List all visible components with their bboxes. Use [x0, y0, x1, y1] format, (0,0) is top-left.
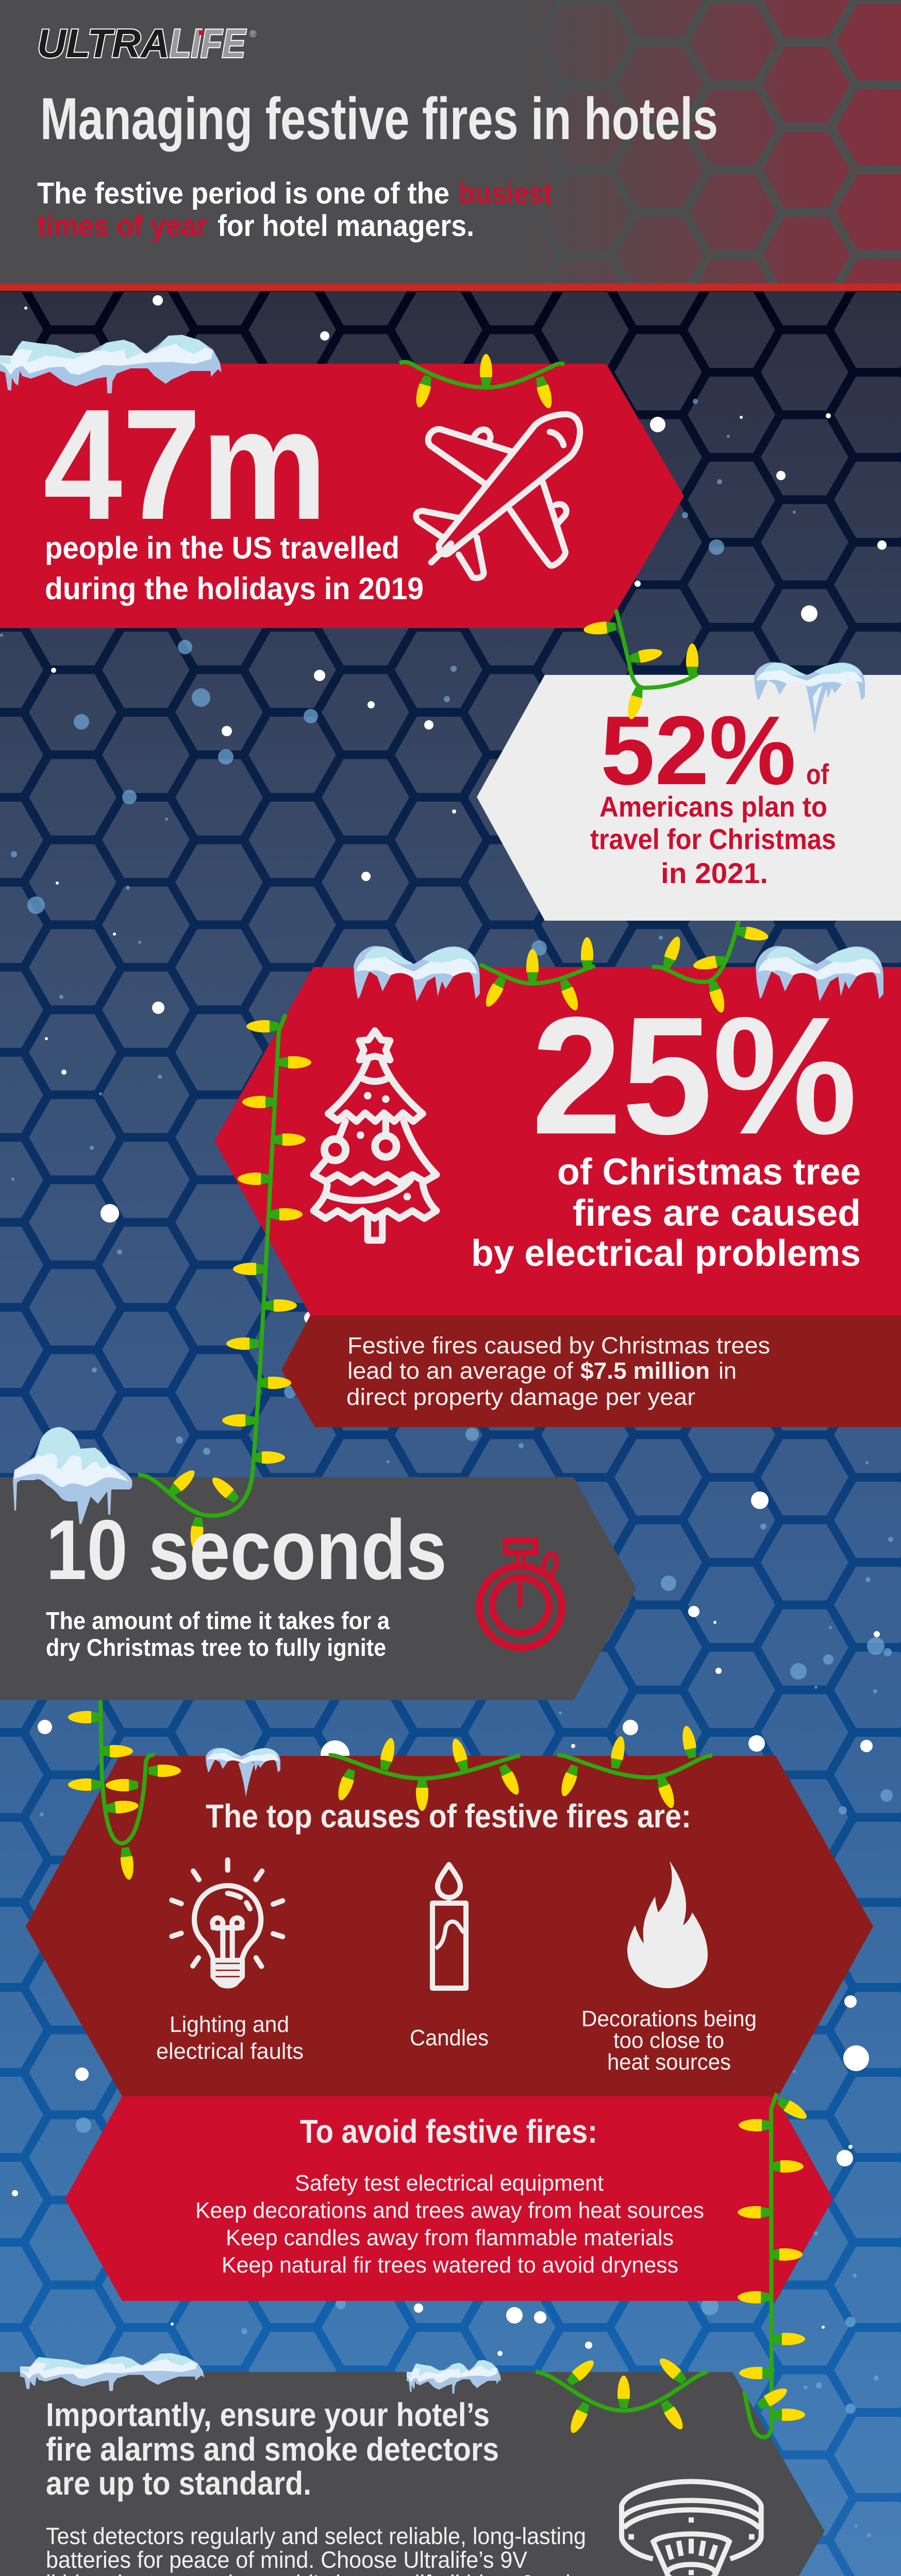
note text: Festive fires caused by Christmas trees — [347, 1332, 770, 1359]
light bulb behind heading — [189, 1517, 205, 1550]
stat caption: dry Christmas tree to fully ignite — [46, 1634, 386, 1661]
stat caption — [471, 1151, 861, 1274]
icon: light bulb — [172, 1860, 282, 1986]
body text: Test detectors regularly and select reliable, long-lasting — [46, 2523, 586, 2549]
stat caption — [45, 531, 424, 606]
snow cap on 52% panel — [754, 662, 865, 735]
label: lighting and electrical faults: electrical faults — [156, 2039, 304, 2064]
panel: property damage note — [281, 1315, 901, 1427]
stat: 10 seconds: 10 seconds — [46, 1502, 447, 1597]
advice list: Keep natural fir trees watered to avoid dryness — [222, 2252, 678, 2278]
label: lighting and electrical faults — [156, 2012, 304, 2064]
stat caption — [46, 1607, 390, 1661]
stat caption: fires are caused — [573, 1193, 861, 1234]
advice list: Keep candles away from flammable materials — [226, 2225, 674, 2250]
stat caption: people in the US travelled — [45, 531, 399, 565]
icon: Christmas tree — [313, 1031, 437, 1240]
stat caption: travel for Christmas — [590, 823, 836, 855]
snow cap left on alarms panel — [20, 2353, 204, 2391]
snow cap on top causes panel — [206, 1748, 280, 1797]
stat caption: Americans plan to — [599, 790, 827, 823]
stat caption: during the holidays in 2019 — [45, 571, 424, 606]
note text — [346, 1332, 770, 1410]
subtitle: busiest — [459, 177, 553, 210]
snow cap on 47m panel — [0, 335, 222, 393]
light bulb behind heading — [416, 1778, 428, 1811]
string of lights: left side of 25% panel to 10 seconds panel — [138, 1014, 311, 1516]
panel: fire alarms and smoke detectors — [0, 2372, 825, 2576]
note text: lead to an average of — [347, 1358, 574, 1384]
note text: direct property damage per year — [346, 1384, 695, 1410]
icon: aeroplane — [416, 414, 580, 578]
stat caption: of — [806, 758, 829, 790]
icon: stopwatch — [479, 1540, 562, 1648]
string of lights: top causes panel right — [557, 1725, 712, 1810]
string of lights: below 10 seconds panel — [68, 1700, 181, 1880]
label: decorations near heat sources — [581, 2006, 757, 2075]
panel: 52% of Americans — [477, 675, 901, 921]
icon: flame — [627, 1861, 708, 1988]
panel: top causes of festive fires — [26, 1756, 873, 2096]
heading: fire alarms and smoke detectors — [46, 2431, 499, 2468]
label: lighting and electrical faults: Lighting and — [170, 2012, 289, 2037]
string of lights: between 47m and 52% panels — [583, 609, 698, 721]
icon: candle — [432, 1865, 466, 1988]
heading: To avoid festive fires: — [300, 2113, 597, 2150]
stat: 52%: 52% — [600, 696, 796, 805]
note text: $7.5 million — [580, 1358, 710, 1384]
label: decorations near heat sources: Decorations being — [581, 2006, 757, 2031]
subtitle: The festive period is one of the — [37, 177, 449, 210]
string of lights: right side of avoid panel — [738, 2093, 810, 2437]
subtitle: times of year — [37, 209, 207, 243]
advice list: Safety test electrical equipment — [295, 2171, 604, 2196]
stat caption: by electrical problems — [471, 1233, 861, 1274]
body text: batteries for peace of mind. Choose Ultralife’s 9V — [46, 2547, 527, 2573]
stat caption — [590, 758, 836, 889]
label: candles: Candles — [410, 2025, 489, 2050]
stat caption: of Christmas tree — [557, 1151, 861, 1193]
panel: 47m people travelled — [0, 364, 684, 628]
string of lights: 25% panel top right — [652, 921, 770, 1014]
advice list: Keep decorations and trees away from heat sources — [195, 2198, 704, 2223]
body text — [46, 2523, 586, 2576]
logo: Ultralife: LIFE — [170, 21, 246, 66]
logo: Ultralife — [37, 21, 256, 66]
panel: 25% of Christmas tree fires — [214, 967, 901, 1315]
logo: Ultralife: ULTRA — [37, 21, 170, 66]
logo: Ultralife: ® — [249, 29, 256, 39]
heading — [46, 2396, 499, 2502]
string of lights: top of 47m panel — [399, 354, 564, 410]
stat: 47m: 47m — [43, 376, 327, 552]
stat: 25%: 25% — [531, 982, 857, 1169]
string of lights: 25% panel top left — [480, 937, 595, 1013]
heading: Importantly, ensure your hotel’s — [46, 2396, 490, 2433]
snow cap on 10 seconds panel — [13, 1427, 132, 1524]
string of lights: top of alarms panel — [536, 2354, 708, 2435]
icon: smoke detector — [622, 2482, 761, 2576]
stat caption: in 2021. — [661, 857, 768, 889]
title: Managing festive fires in hotels — [40, 86, 718, 152]
panel: to avoid festive fires — [65, 2096, 833, 2301]
panel: 10 seconds — [0, 1477, 637, 1700]
note text: in — [719, 1358, 737, 1384]
label: decorations near heat sources: too close to — [613, 2028, 724, 2053]
stat caption: The amount of time it takes for a — [46, 1607, 390, 1634]
string of lights: top causes panel left — [329, 1737, 523, 1802]
label: decorations near heat sources: heat sources — [607, 2049, 731, 2075]
snow cap centre on alarms panel — [407, 2360, 501, 2394]
advice list — [195, 2171, 704, 2278]
heading: The top causes of festive fires are: — [206, 1798, 691, 1835]
subtitle: for hotel managers. — [218, 209, 474, 243]
header background — [0, 0, 901, 291]
subtitle — [37, 177, 553, 243]
heading: are up to standard. — [46, 2465, 311, 2502]
snow cap left on 25% panel — [354, 946, 480, 1002]
snow cap right on 25% panel — [756, 946, 883, 1002]
